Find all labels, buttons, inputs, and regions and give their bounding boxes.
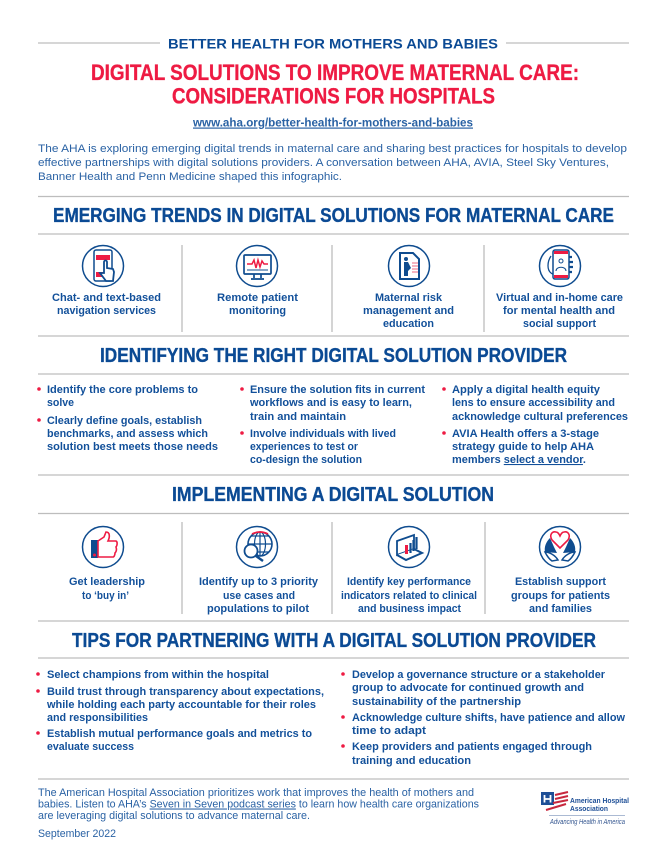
heading: tips: TIPS FOR PARTNERING WITH A DIGITAL SOLUTION PROVIDER [72,630,596,652]
title: CONSIDERATIONS FOR HOSPITALS [172,84,495,108]
bullets: column 1: Identify the core problems to [47,384,198,396]
label: leadership: Get leadership [69,576,145,588]
bullets: column 2: train and maintain [250,411,346,423]
icon: thumbs up [82,526,124,568]
logo: American Hospital Association [541,792,629,826]
bullets: column 2: Ensure the solution fits in current [250,384,425,396]
title [91,60,579,108]
tips: left column: Build trust through transparency about expectations, [47,686,324,698]
label: kpis [341,576,477,615]
tips: left column: Establish mutual performance goals and metrics to [47,728,312,740]
logo: American Hospital Association: American Hospital [570,796,629,805]
label: leadership: to ‘buy in’ [82,590,129,602]
link: website: www.aha.org/better-health-for-mothers-and-babies [192,116,473,130]
icon: monitor with heartbeat [236,246,278,286]
intro paragraph [38,143,627,183]
intro paragraph: The AHA is exploring emerging digital trends in maternal care and sharing best practices for hospitals to develop [38,143,627,155]
label: virtual care [496,292,623,330]
label: maternal risk: management and [363,305,454,317]
tips: right column [341,669,626,767]
icon: hand holding phone [540,246,580,286]
label: virtual care: Virtual and in-home care [496,292,623,304]
label: kpis: Identify key performance [347,576,471,588]
title: DIGITAL SOLUTIONS TO IMPROVE MATERNAL CARE: [91,60,579,85]
tips: right column: Acknowledge culture shifts, have patience and allow [352,712,626,724]
label: priority use cases [199,576,318,615]
bullets: column 1: solution best meets those needs [47,441,218,453]
tips: right column: sustainability of the partnership [352,696,521,708]
label: chat and text navigation: navigation services [57,305,156,317]
tips: right column: Keep providers and patients engaged through [352,741,592,753]
label: priority use cases: use cases and [223,590,295,602]
intro paragraph: Banner Health and Penn Medicine shaped this infographic. [38,171,342,183]
bullets: column 1 [37,384,218,453]
bullets: column 1: solve [47,397,74,409]
label: virtual care: social support [523,318,596,330]
bullets: column 2: Involve individuals with lived [250,428,396,440]
bullets: column 2: co-design the solution [250,454,362,466]
tips: right column: Develop a governance structure or a stakeholder [352,669,605,681]
tips: left column: Select champions from within the hospital [47,669,269,681]
tips: left column: while holding each party accountable for their roles [46,699,316,711]
heading: identifying provider: IDENTIFYING THE RIGHT DIGITAL SOLUTION PROVIDER [100,345,567,367]
bullets: column 2 [240,384,425,466]
bullets: column 3: AVIA Health offers a 3-stage [452,428,599,440]
logo: American Hospital Association: Advancing Health in America [549,819,625,826]
tips: right column: group to advocate for continued growth and [352,682,584,694]
bullets: column 1: benchmarks, and assess which [47,428,208,440]
heading: implementing: IMPLEMENTING A DIGITAL SOLUTION [172,484,494,506]
bullets: column 3: strategy guide to help AHA [452,441,594,453]
label: virtual care: for mental health and [503,305,615,317]
label: priority use cases: Identify up to 3 priority [199,576,318,588]
bullets: column 2: workflows and is easy to learn, [249,397,412,409]
label: maternal risk: Maternal risk [375,292,442,304]
icon: laptop with bar chart [388,526,430,568]
footer text: babies. Listen to AHA’s Seven in Seven podcast series to learn how health care organizations [38,798,479,810]
label: support groups [511,576,610,615]
bullets: column 3 [442,384,628,466]
icon: hands holding heart [540,526,580,568]
date: September 2022 [38,828,116,840]
label: support groups: groups for patients [511,590,610,602]
label: leadership [69,576,145,602]
label: maternal risk [363,292,454,330]
footer text: The American Hospital Association prioritizes work that improves the health of mothers and [38,787,474,799]
icon: document with pregnant figure [388,246,430,286]
bullets: column 2: experiences to test or [250,441,358,453]
icon: globe with magnifier [236,526,278,568]
icon: phone with pointing hand [82,246,124,286]
label: priority use cases: populations to pilot [207,603,309,615]
label: maternal risk: education [383,318,434,330]
logo: American Hospital Association: Association [570,804,608,813]
footer text [38,787,479,822]
label: remote monitoring [217,292,298,317]
tips: left column [36,669,324,753]
tips: right column: time to adapt [352,725,426,737]
label: chat and text navigation: Chat- and text-based [52,292,161,304]
label: remote monitoring: Remote patient [217,292,298,304]
label: support groups: Establish support [515,576,606,588]
bullets: column 1: Clearly define goals, establish [47,415,202,427]
intro paragraph: effective partnerships with digital solutions providers. A conversation between AHA, AVIA, Steel Sky Ventures, [38,157,609,169]
label: support groups: and families [529,603,592,615]
label: kpis: indicators related to clinical [341,590,477,602]
label: remote monitoring: monitoring [229,305,286,317]
label: chat and text navigation [52,292,161,317]
tips: left column: and responsibilities [47,712,148,724]
bullets: column 3: members select a vendor. [452,454,586,466]
header: eyebrow: BETTER HEALTH FOR MOTHERS AND BABIES [168,36,498,52]
footer text: are leveraging digital solutions to advance maternal care. [38,810,310,822]
tips: left column: evaluate success [47,741,134,753]
tips: right column: training and education [352,755,471,767]
bullets: column 3: acknowledge cultural preferences [452,411,628,423]
label: kpis: and business impact [358,603,461,615]
bullets: column 3: lens to ensure accessibility and [452,397,615,409]
bullets: column 3: Apply a digital health equity [452,384,600,396]
